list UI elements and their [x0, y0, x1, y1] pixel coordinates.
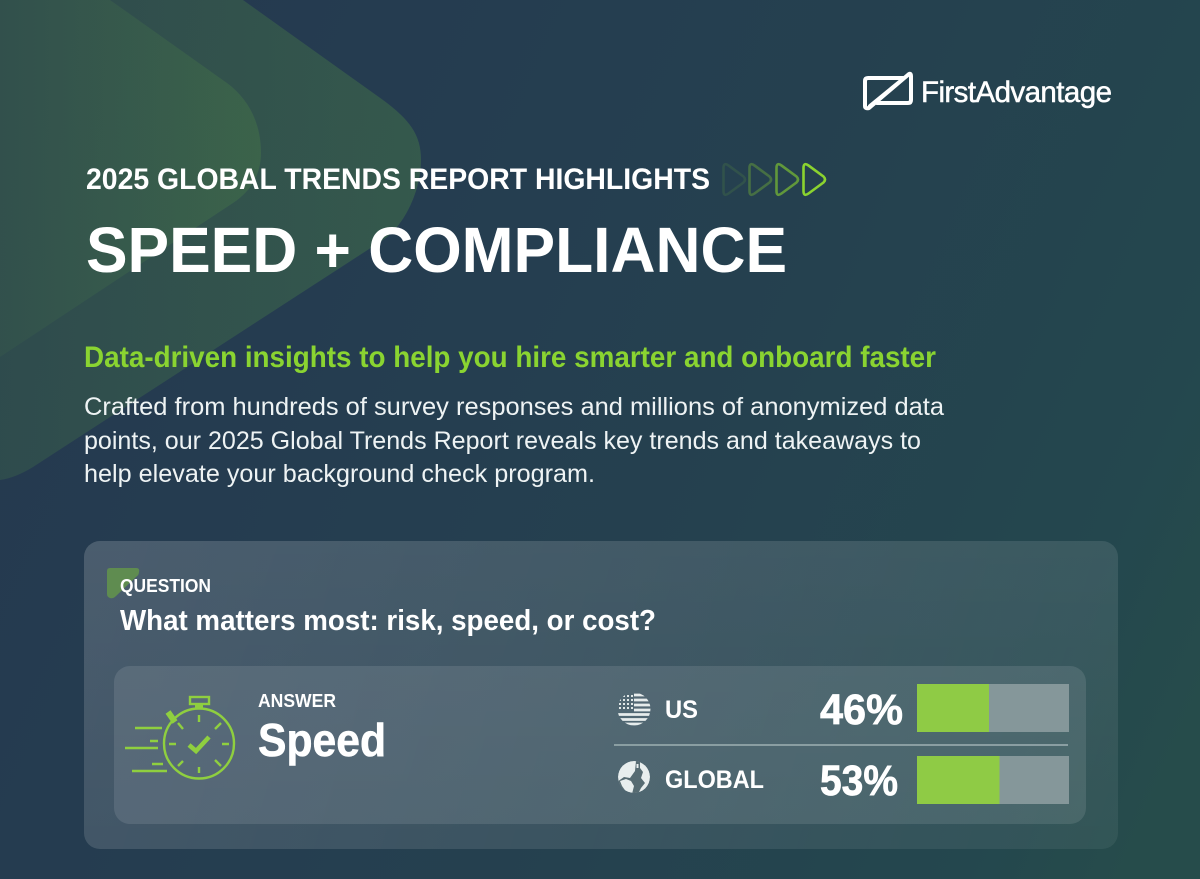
- title: SPEED + COMPLIANCE: [86, 214, 787, 286]
- icon: US flag: [616, 695, 652, 724]
- intro paragraph: Crafted from hundreds of survey responses and millions of anonymized data: [84, 393, 944, 421]
- US bar: [917, 684, 1069, 732]
- logo mark: [865, 74, 911, 108]
- US label: US: [665, 696, 698, 724]
- answer value: Speed: [258, 714, 386, 766]
- GLOBAL percentage: 53%: [820, 757, 898, 805]
- panel: question card: [84, 541, 1118, 849]
- answer label: ANSWER: [258, 691, 336, 711]
- logo: [865, 74, 1112, 109]
- question label: QUESTION: [120, 576, 211, 596]
- icon: stopwatch: [125, 697, 234, 778]
- icon: globe: [617, 761, 650, 794]
- eyebrow heading: 2025 GLOBAL TRENDS REPORT HIGHLIGHTS: [86, 163, 710, 196]
- GLOBAL bar: [917, 756, 1069, 804]
- GLOBAL label: GLOBAL: [665, 766, 764, 794]
- question text: What matters most: risk, speed, or cost?: [120, 605, 656, 637]
- chevron arrows: [724, 164, 825, 195]
- subtitle: Data-driven insights to help you hire smarter and onboard faster: [84, 341, 936, 374]
- US percentage: 46%: [820, 686, 903, 734]
- logo wordmark: FirstAdvantage: [921, 76, 1112, 109]
- decorative arrow shapes: [0, 0, 421, 480]
- intro paragraph: help elevate your background check program.: [84, 460, 595, 488]
- intro paragraph: points, our 2025 Global Trends Report reveals key trends and takeaways to: [84, 427, 921, 455]
- intro paragraph: [84, 393, 944, 488]
- question tag: [107, 568, 139, 598]
- panel: answer card: [114, 666, 1086, 824]
